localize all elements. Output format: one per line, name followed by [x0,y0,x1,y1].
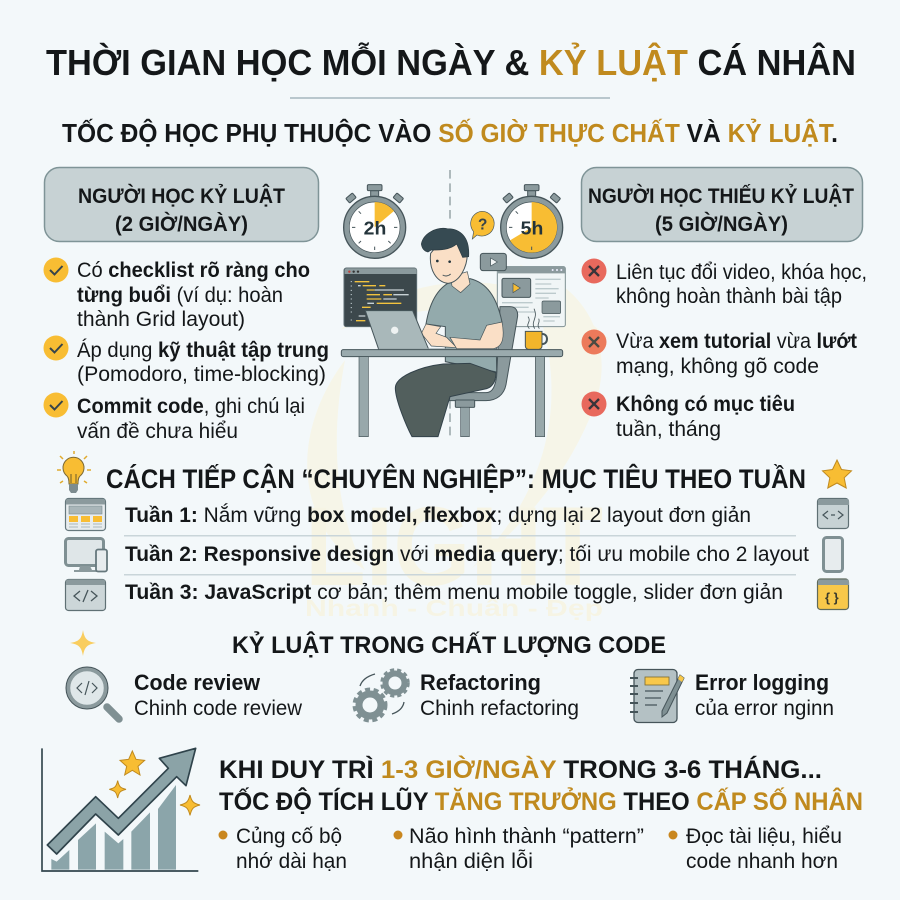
panel: undisciplined learner [582,168,867,441]
icon: javascript window [818,579,849,610]
benefit: faster reading [668,825,842,873]
subtitle: TỐC ĐỘ HỌC PHỤ THUỘC VÀO SỐ GIỜ THỰC CHẤT VÀ KỶ LUẬT. [62,118,838,148]
item: no goals [582,392,795,441]
benefit: long-term memory [218,825,347,873]
watermark logo: LIGHT [305,484,603,609]
heading: compounding growth: KHI DUY TRÌ 1-3 GIỜ/NGÀY TRONG 3-6 THÁNG... [219,754,822,784]
heading: compounding growth: TỐC ĐỘ TÍCH LŨY TĂNG TRƯỞNG THEO CẤP SỐ NHÂN [219,786,863,816]
title: THỜI GIAN HỌC MỖI NGÀY & KỶ LUẬT CÁ NHÂN [46,41,856,83]
laptop [365,311,456,349]
item: code review [66,667,303,720]
week 1 text: Tuần 1: Nắm vững box model, flexbox; dựng lại 2 layout đơn giản [125,504,751,527]
item: tutorial and browsing [582,330,857,378]
icon: layout window [66,498,106,530]
icon: desktop and phone [66,538,107,572]
undisciplined heading: NGƯỜI HỌC THIẾU KỶ LUẬT [588,184,854,208]
item: no goals: tuần, tháng [616,418,721,441]
desk [341,350,563,437]
icon: magnifier [66,667,119,719]
watermark logo: Nhanh - Chuẩn - Đẹp [305,595,603,621]
chair [449,307,518,437]
video browser window [480,253,565,327]
watermark logo [305,265,610,621]
item: switching videos [582,258,867,308]
disciplined heading: NGƯỜI HỌC KỶ LUẬT [78,184,285,208]
panel: disciplined learner [44,168,329,443]
chart: growth arrow [42,748,200,871]
icon: phone [824,538,842,572]
heading: compounding growth [219,754,863,816]
item: refactoring: Chinh refactoring [420,697,579,720]
benefit: error patterns: nhận diện lỗi [409,850,533,873]
icon: gears [354,670,408,720]
icon: question bubble: ? [478,217,487,234]
item: code review: Chinh code review [134,697,303,720]
benefit: faster reading: code nhanh hơn [686,850,838,873]
icon: stopwatch 5h: 5h [521,217,543,238]
week 2 row [66,538,842,572]
item: commit code: vấn đề chưa hiểu [77,420,238,443]
item: checklist: Có checklist rõ ràng cho [77,259,310,282]
benefit: error patterns: Não hình thành “pattern” [409,825,644,848]
week 2 text: Tuần 2: Responsive design với media query; tối ưu mobile cho 2 layout [125,543,809,566]
item: refactoring [354,670,579,720]
item: code review: Code review [134,670,261,695]
icon: question bubble [471,211,494,239]
item: error logging: Error logging [695,670,829,695]
week 1 row [66,498,849,530]
item: tutorial and browsing: mạng, không gõ code [616,355,819,378]
item: checklist [44,258,310,331]
icon: notebook and pencil [630,670,684,722]
benefit: long-term memory: nhớ dài hạn [236,850,347,873]
item: tutorial and browsing: Vừa xem tutorial vừa lướt [616,330,857,353]
week 3 row [66,579,849,610]
benefit: faster reading: Đọc tài liệu, hiểu [686,825,842,848]
icon: star [822,460,852,488]
item: focus technique: Áp dụng kỹ thuật tập trung [77,339,329,362]
item: focus technique [44,336,329,386]
icon: stopwatch 2h [344,185,406,258]
illustration: learner at desk [341,170,565,437]
icon: html code window [66,580,106,610]
icon: javascript window: { } [825,590,839,605]
icon: sparkle [70,630,96,656]
code editor window [344,268,417,327]
disciplined heading [44,168,318,242]
item: checklist: thành Grid layout) [77,308,245,331]
item: error logging [630,670,834,722]
benefit: error patterns [394,825,644,873]
coffee mug [525,309,547,349]
item: switching videos: Liên tục đổi video, khóa học, [616,261,867,284]
item: switching videos: không hoàn thành bài tập [616,285,842,308]
undisciplined heading [582,168,862,242]
person [395,228,503,437]
heading: weekly goals: CÁCH TIẾP CẬN “CHUYÊN NGHIỆP”: MỤC TIÊU THEO TUẦN [106,463,806,494]
item: refactoring: Refactoring [420,670,541,695]
icon: stopwatch 2h: 2h [364,217,386,238]
item: focus technique: (Pomodoro, time-blocking) [77,363,326,386]
item: commit code: Commit code, ghi chú lại [77,395,305,418]
item: error logging: của error nginn [695,697,834,720]
icon: stopwatch 5h [501,185,563,258]
undisciplined heading: (5 GIỜ/NGÀY) [655,212,788,236]
benefit: long-term memory: Củng cố bộ [236,825,342,848]
heading: code quality: KỶ LUẬT TRONG CHẤT LƯỢNG CODE [232,630,666,659]
item: commit code [44,392,305,443]
icon: code window [818,498,849,528]
icon: light bulb [57,451,91,493]
week 3 text: Tuần 3: JavaScript cơ bản; thêm menu mobile toggle, slider đơn giản [125,581,783,604]
item: no goals: Không có mục tiêu [616,393,795,416]
disciplined heading: (2 GIỜ/NGÀY) [115,212,248,236]
item: checklist: từng buổi (ví dụ: hoàn [77,284,283,307]
